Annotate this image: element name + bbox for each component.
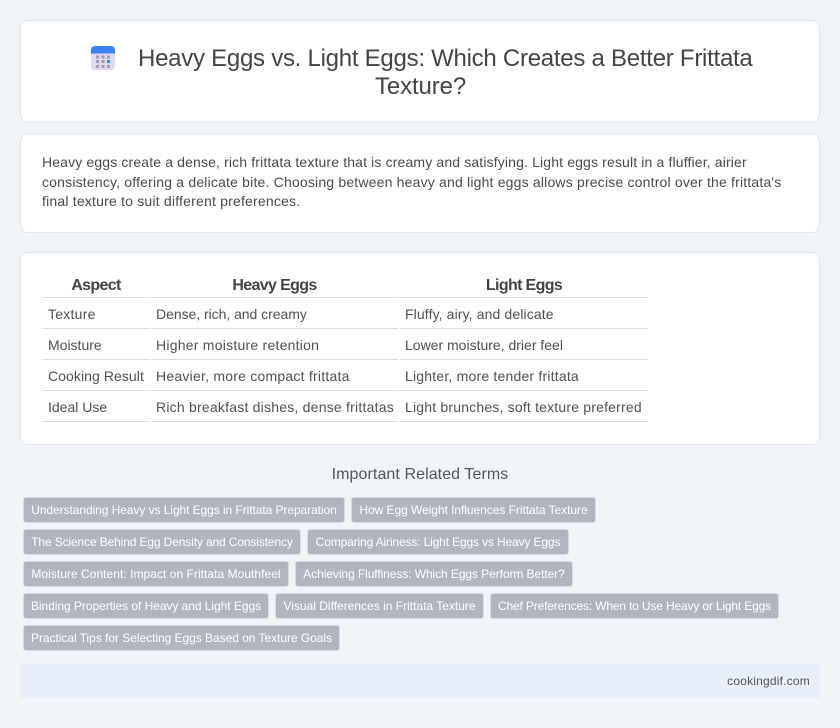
panel: comparison table [20,252,820,445]
panel: title card [20,20,820,123]
heading: Important Related Terms: Important Related Terms [332,466,508,483]
footer text: cookingdif.com [727,674,810,688]
row: Moisture [48,337,563,353]
tag [23,593,269,619]
row: Moisture: Moisture [48,337,102,353]
tag: How Egg Weight Influences Frittata Texture [359,503,588,517]
row: Texture: Texture [48,306,96,322]
row: Cooking Result [48,368,579,384]
tag [490,593,779,619]
tag: Chef Preferences: When to Use Heavy or Light Eggs [498,599,771,613]
text: Texture? [375,73,466,100]
tag [351,497,596,523]
tag [23,529,301,555]
tag: Understanding Heavy vs Light Eggs in Frittata Preparation [31,503,337,517]
row: Cooking Result: Heavier, more compact frittata [156,368,350,384]
tag: The Science Behind Egg Density and Consistency [31,535,293,549]
text: Heavy Eggs vs. Light Eggs: Which Creates a Better Frittata [138,45,753,72]
row: Texture [48,306,554,322]
tag: Visual Differences in Frittata Texture [283,599,476,613]
table header: Aspect: Aspect [71,277,121,294]
text block: introduction: final texture to suit different preferences. [42,193,300,209]
footer [20,664,820,698]
row: Ideal Use: Rich breakfast dishes, dense frittatas [156,399,394,415]
tag [23,497,345,523]
row: Ideal Use: Ideal Use [48,399,107,415]
row: Texture: Fluffy, airy, and delicate [405,306,554,322]
table header: Heavy Eggs: Heavy Eggs [232,277,317,294]
row: Cooking Result: Lighter, more tender frittata [405,368,579,384]
comparison table [43,277,648,422]
tag: Comparing Airiness: Light Eggs vs Heavy Eggs [316,535,560,549]
row: Moisture: Lower moisture, drier feel [405,337,563,353]
row: Ideal Use [48,399,642,415]
panel: introduction [20,133,820,233]
tag [23,625,340,651]
table header: Light Eggs: Light Eggs [486,277,562,294]
tag [307,529,569,555]
row: Texture: Dense, rich, and creamy [156,306,307,322]
icon: calendar grid [91,46,115,70]
tag: Moisture Content: Impact on Frittata Mouthfeel [31,567,281,581]
text block: introduction: consistency, offering a delicate bite. Choosing between heavy and light eggs allows precise control over the frittata's [42,174,781,190]
row: Cooking Result: Cooking Result [48,368,144,384]
tag [23,561,289,587]
tag: Achieving Fluffiness: Which Eggs Perform Better? [303,567,565,581]
row: Ideal Use: Light brunches, soft texture preferred [405,399,642,415]
related terms tags [23,497,779,651]
tag: Binding Properties of Heavy and Light Eggs [31,599,261,613]
text block: introduction [42,154,781,209]
tag: Practical Tips for Selecting Eggs Based on Texture Goals [31,631,332,645]
text block: introduction: Heavy eggs create a dense, rich frittata texture that is creamy and satisfying. Light eggs result in a fluffier, airier [42,154,747,170]
row: Moisture: Higher moisture retention [156,337,319,353]
title [138,45,753,100]
tag [275,593,484,619]
tag [295,561,573,587]
